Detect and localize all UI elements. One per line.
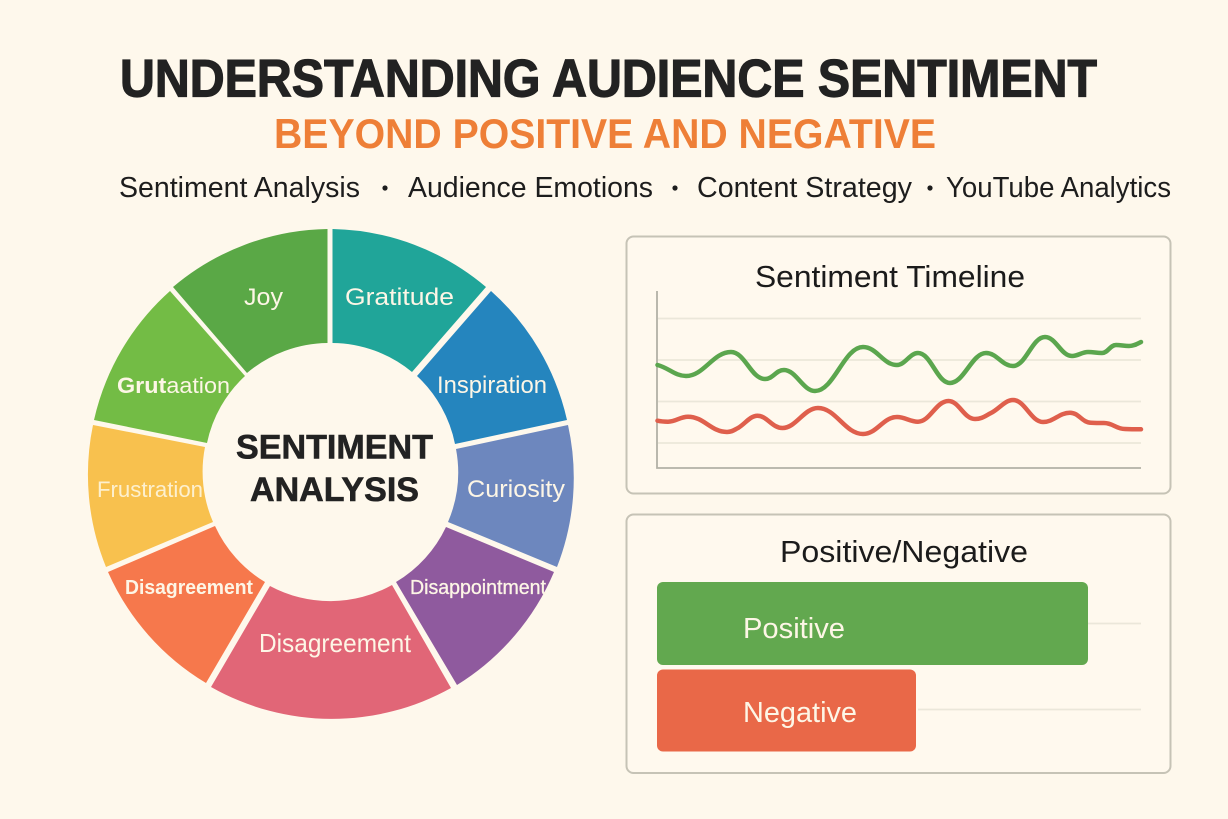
bar: positive: Positive [743, 613, 845, 645]
segment: Gratitude [332, 229, 486, 372]
topic tagline: YouTube Analytics [946, 172, 1171, 204]
segment: Disagreement orange [108, 526, 265, 683]
segment: Gratitude: Gratitude [345, 284, 454, 311]
panel: sentiment timeline [626, 236, 1170, 494]
segment: Disappointment: Disappointment [410, 576, 546, 599]
segment: Disagreement pink: Disagreement [259, 628, 412, 658]
topic tagline: Sentiment Analysis [119, 172, 360, 204]
segment: Disappointment [396, 527, 554, 685]
segment: Grutaation [94, 291, 245, 443]
subtitle: BEYOND POSITIVE AND NEGATIVE [274, 110, 936, 157]
title: UNDERSTANDING AUDIENCE SENTIMENT [120, 50, 1097, 108]
segment: Curiosity [448, 425, 574, 567]
segment: Disagreement orange: Disagreement [125, 576, 253, 599]
heading: sentiment timeline: Sentiment Timeline [755, 259, 1025, 294]
panel: positive/negative [626, 514, 1170, 773]
segment: Grutaation: Grutaation [117, 373, 230, 398]
sentiment wheel [88, 229, 574, 719]
topic tagline: Audience Emotions [408, 172, 653, 204]
segment: Inspiration: Inspiration [437, 372, 547, 399]
segment: Inspiration [417, 291, 567, 444]
segment: Frustration: Frustration [97, 477, 203, 502]
wheel centre label: ANALYSIS [250, 471, 419, 509]
bar: positive [657, 582, 1088, 665]
segment: Joy [173, 229, 328, 373]
topic tagline: Content Strategy [697, 172, 912, 204]
line chart [657, 291, 1141, 468]
heading: positive/negative: Positive/Negative [780, 534, 1028, 569]
wheel centre label: SENTIMENT [236, 428, 433, 466]
segment: Frustration [88, 425, 213, 567]
segment: Disagreement pink [211, 585, 451, 719]
segment: Joy: Joy [244, 284, 284, 311]
bar: negative: Negative [743, 697, 857, 729]
line: positive sentiment [658, 337, 1141, 391]
wheel centre label [236, 428, 433, 509]
bar: negative [657, 670, 916, 752]
topic tagline [119, 172, 1171, 204]
segment: Curiosity: Curiosity [467, 476, 566, 503]
line: negative sentiment [658, 400, 1141, 434]
